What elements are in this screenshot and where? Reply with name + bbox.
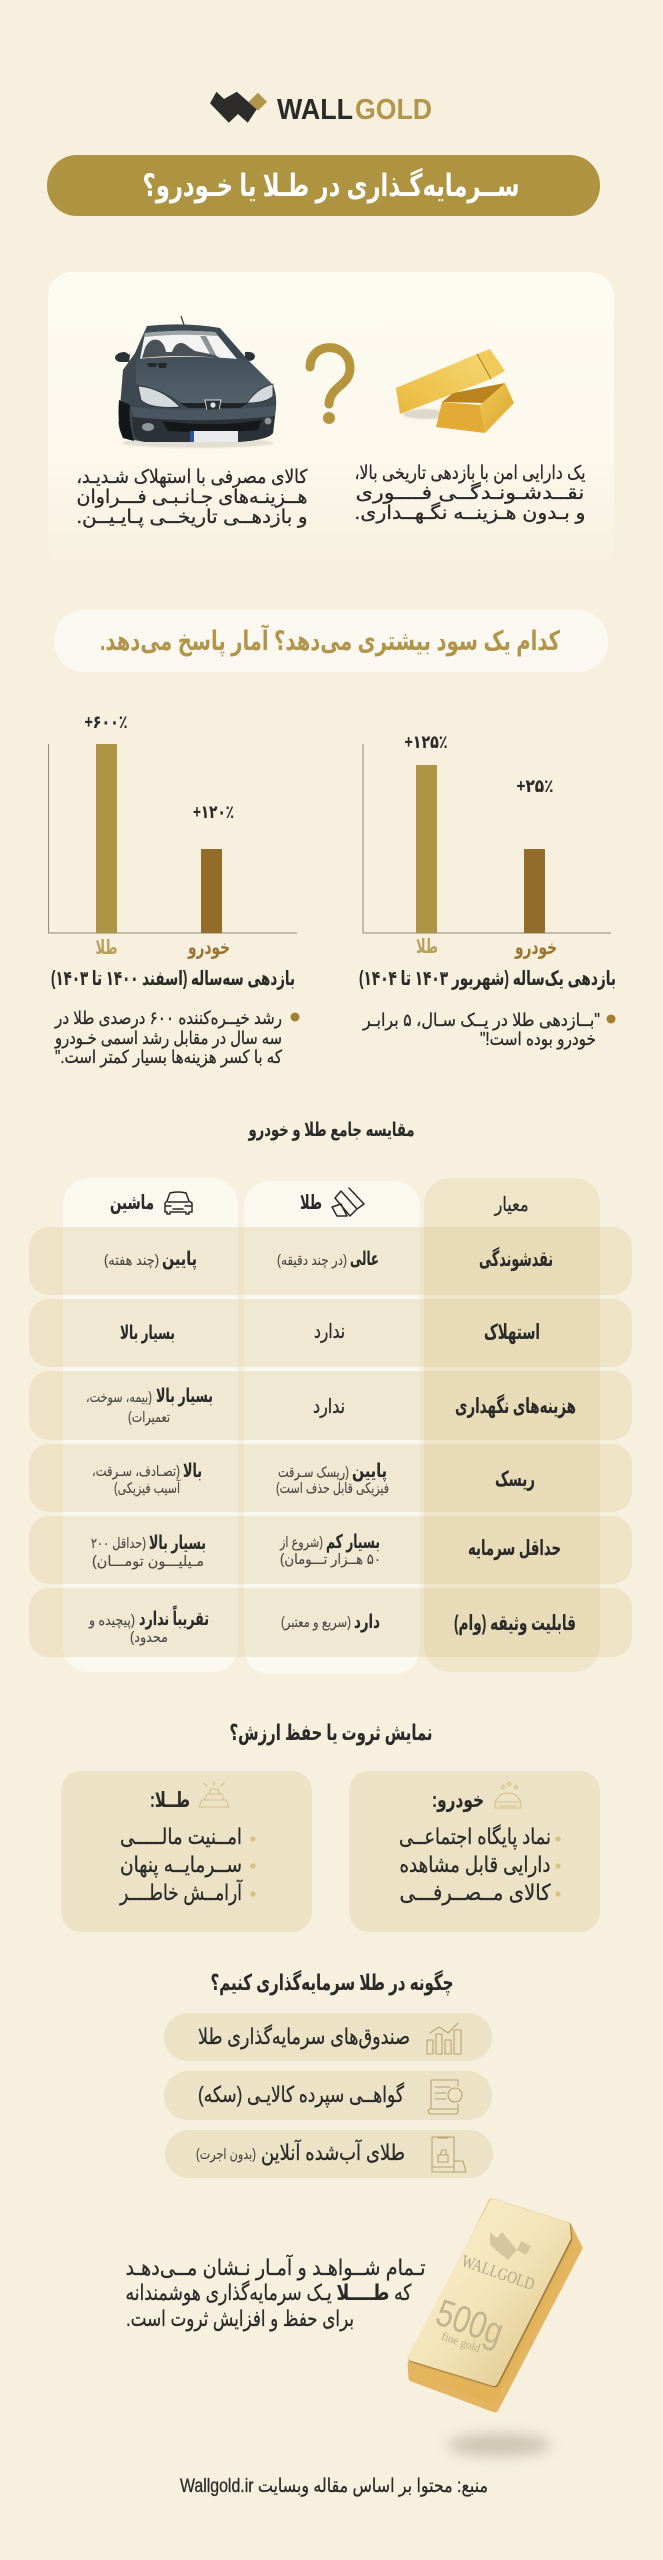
header: criterion: معیار xyxy=(494,1194,529,1216)
chart: three-year return: +۶۰۰٪ xyxy=(84,712,128,732)
text: car description: و بازدهــی تاریخــی پـایـیــن. xyxy=(76,507,308,528)
icon: gold bar 500g: WALLGOLD xyxy=(459,2251,537,2294)
row: minimum capital: (حداقل ۲۰۰ xyxy=(91,1536,146,1552)
text: car description xyxy=(76,467,308,528)
heading: how to invest: چگونه در طلا سرمایه‌گذاری کنیم؟ xyxy=(210,1969,454,1996)
panel: gold xyxy=(61,1771,312,1932)
closing statement: تـمام شــواهـد و آمـار نـشان مــی‌دهـد xyxy=(126,2254,426,2280)
row: liquidity: (در چند دقیقه) xyxy=(277,1253,347,1269)
chart: one-year return: +۲۵٪ xyxy=(516,776,554,796)
panel: gold versus car xyxy=(48,272,614,570)
row: upkeep cost: (بیمه، سوخت، xyxy=(86,1390,152,1406)
row: depreciation xyxy=(120,1321,540,1344)
row: risk: فیزیکی قابل حذف است) xyxy=(276,1481,389,1497)
logo: Wallgold xyxy=(210,92,432,126)
note: three-year: سه سال در مقابل رشد اسمی خـودرو xyxy=(54,1028,282,1049)
row: collateral xyxy=(88,1605,576,1646)
text: gold description xyxy=(354,463,586,524)
option: commodity deposit certificate xyxy=(164,2071,492,2120)
row: collateral: قابلیت وثیقه (وام) xyxy=(454,1612,576,1635)
text: gold description: و بـدون هـزینــه نگـهــداری. xyxy=(354,501,586,524)
closing statement xyxy=(125,2254,425,2332)
option: online melted gold: طلای آب‌شده آنلاین xyxy=(261,2139,405,2165)
note: one-year xyxy=(362,1010,616,1050)
heading: which yields more xyxy=(54,610,608,672)
title banner xyxy=(47,155,600,216)
header: gold: طلا xyxy=(300,1192,322,1214)
chart title: three-year: بازدهی سه‌ساله (اسفند ۱۴۰۰ تا ۱۴۰۳) xyxy=(51,968,295,990)
panel: gold: آرامــش خاطــــر xyxy=(119,1879,243,1906)
panel: gold: ســرمایــه پنهان xyxy=(120,1852,242,1878)
row: risk: آسیب فیزیکی) xyxy=(114,1479,181,1497)
rows xyxy=(29,1227,632,1657)
text: car description: هــزینـه‌های جـانـبـی فـــراوان xyxy=(76,487,308,508)
chart: one-year return xyxy=(363,732,611,959)
bar shadow xyxy=(447,2434,551,2456)
icon: chart xyxy=(427,2023,461,2054)
heading: comparison: مقایسه جامع طلا و خودرو xyxy=(248,1120,414,1141)
row: risk xyxy=(92,1461,535,1497)
row: upkeep cost: تعمیرات) xyxy=(128,1410,170,1426)
row: minimum capital: مـیلیـــون تومـــان) xyxy=(92,1554,204,1570)
row: risk: ریسک xyxy=(495,1468,535,1491)
comparison table xyxy=(29,1178,632,1674)
logo: Wallgold: GOLD xyxy=(355,94,432,126)
row: upkeep cost: ندارد xyxy=(313,1396,345,1418)
row: risk: (ریسک سـرقت xyxy=(278,1465,349,1481)
panel: car: دارایی قابل مشاهده xyxy=(400,1852,550,1877)
title banner: ســرمایه‌گـذاری در طـلا یا خـودرو؟ xyxy=(142,167,520,204)
panel: gold: امــنیت مالـــــی xyxy=(120,1824,242,1849)
row: risk: بالا xyxy=(183,1461,202,1482)
row: liquidity xyxy=(104,1246,553,1271)
note: three-year xyxy=(54,1008,300,1068)
icon: phone with gold xyxy=(432,2137,466,2172)
chart: one-year return: خودرو xyxy=(514,937,557,959)
panel: car xyxy=(349,1771,600,1932)
header: car: ماشین xyxy=(110,1192,154,1214)
chart: three-year return xyxy=(49,712,297,959)
source line: منبع: محتوا بر اساس مقاله وبسایت Wallgold.ir xyxy=(180,2476,488,2497)
row: risk: (تصـادف، سـرقت، xyxy=(92,1464,180,1480)
option: gold investment funds xyxy=(164,2013,492,2061)
icon: certificate xyxy=(428,2080,458,2114)
row: liquidity: نقدشوندگی xyxy=(479,1246,553,1271)
panel: car: خودرو: xyxy=(432,1789,484,1812)
row: minimum capital: ۵۰ هــزار تـــومان) xyxy=(280,1552,381,1568)
row: depreciation: بسیار بالا xyxy=(120,1323,175,1344)
chart: three-year return: +۱۲۰٪ xyxy=(193,802,234,822)
icon: shiny car xyxy=(495,1782,521,1808)
chart: three-year return: طلا xyxy=(96,937,118,959)
row: depreciation: استهلاک xyxy=(484,1321,540,1344)
option: online melted gold xyxy=(165,2130,493,2178)
column: criterion xyxy=(424,1178,600,1672)
chart: one-year return: طلا xyxy=(416,936,438,958)
note: one-year: "بــازدهی طلا در یــک سـال، ۵ برابـر xyxy=(362,1010,600,1031)
chart: three-year return: خودرو xyxy=(187,937,230,959)
option: online melted gold: (بدون اجرت) xyxy=(196,2147,256,2163)
icon: gold bar 500g: fine gold xyxy=(440,2329,482,2355)
row: collateral: محدود) xyxy=(130,1630,168,1646)
row: liquidity: عالی xyxy=(350,1249,379,1270)
panel: car: کالای مــصــرفـــی xyxy=(400,1880,551,1905)
chart: one-year return: +۱۲۵٪ xyxy=(404,732,448,752)
row: risk: پایین xyxy=(352,1461,387,1482)
closing statement: که طــــلا یـک سرمایه‌گذاری هوشمندانه xyxy=(125,2280,412,2305)
logo: Wallgold: WALL xyxy=(277,94,353,126)
row: minimum capital: حداقل سرمایه xyxy=(468,1537,561,1560)
text: gold description: نقــدشـونـدگــی فــــوری xyxy=(356,481,584,504)
panel: car: نماد پایگاه اجتماعــی xyxy=(399,1824,551,1850)
row: minimum capital: بسیار بالا xyxy=(149,1533,206,1554)
row: collateral: (پیچیده و xyxy=(88,1613,135,1629)
icon: gold bar 500g: 500g xyxy=(431,2292,509,2354)
row: collateral: (سریع و معتبر) xyxy=(281,1615,351,1631)
header: gold xyxy=(300,1188,364,1216)
icon: question mark xyxy=(310,348,350,424)
note: three-year: رشد خیــره‌کننده ۶۰۰ درصدی طلا در xyxy=(54,1008,282,1029)
column: gold xyxy=(244,1181,420,1674)
option: commodity deposit certificate: گواهــی سپرده کالایـی (سکه) xyxy=(198,2082,404,2108)
row: minimum capital xyxy=(91,1532,561,1570)
text: gold description: یک دارایی امن با بازدهی تاریخی بالا، xyxy=(354,463,586,484)
text: car description: کالای مصرفی با استهلاک شـدیـد، xyxy=(76,467,308,488)
note: one-year: خودرو بوده است!" xyxy=(480,1029,596,1050)
note: three-year: که با کسر هزینه‌ها بسیار کمتر است." xyxy=(55,1047,282,1068)
panel: gold: طــلا: xyxy=(150,1789,190,1812)
row: upkeep cost: بسیار بالا xyxy=(156,1386,213,1407)
row: collateral: تقریباً ندارد xyxy=(139,1605,209,1630)
row: liquidity: (چند هفته) xyxy=(104,1253,159,1269)
closing statement: برای حفظ و افزایش ثروت است. xyxy=(126,2306,354,2332)
row: collateral: دارد xyxy=(354,1612,380,1633)
row: minimum capital: (شروع از xyxy=(279,1535,323,1551)
icon: gold stack xyxy=(199,1782,229,1807)
row: upkeep cost xyxy=(86,1386,576,1426)
row: upkeep cost: هزینه‌های نگهداری xyxy=(455,1393,576,1418)
icon: gold bar 500g xyxy=(411,2202,579,2409)
column: car xyxy=(63,1178,238,1672)
option: gold investment funds: صندوق‌های سرمایه‌گذاری طلا xyxy=(198,2024,410,2049)
heading: wealth display or value: نمایش ثروت یا حفظ ارزش؟ xyxy=(230,1720,432,1746)
row: depreciation: ندارد xyxy=(314,1321,345,1343)
icon: gold bars xyxy=(396,349,514,433)
icon: car photo xyxy=(115,316,276,448)
row: liquidity: پایین xyxy=(162,1249,197,1270)
row: minimum capital: بسیار کم xyxy=(326,1532,380,1553)
